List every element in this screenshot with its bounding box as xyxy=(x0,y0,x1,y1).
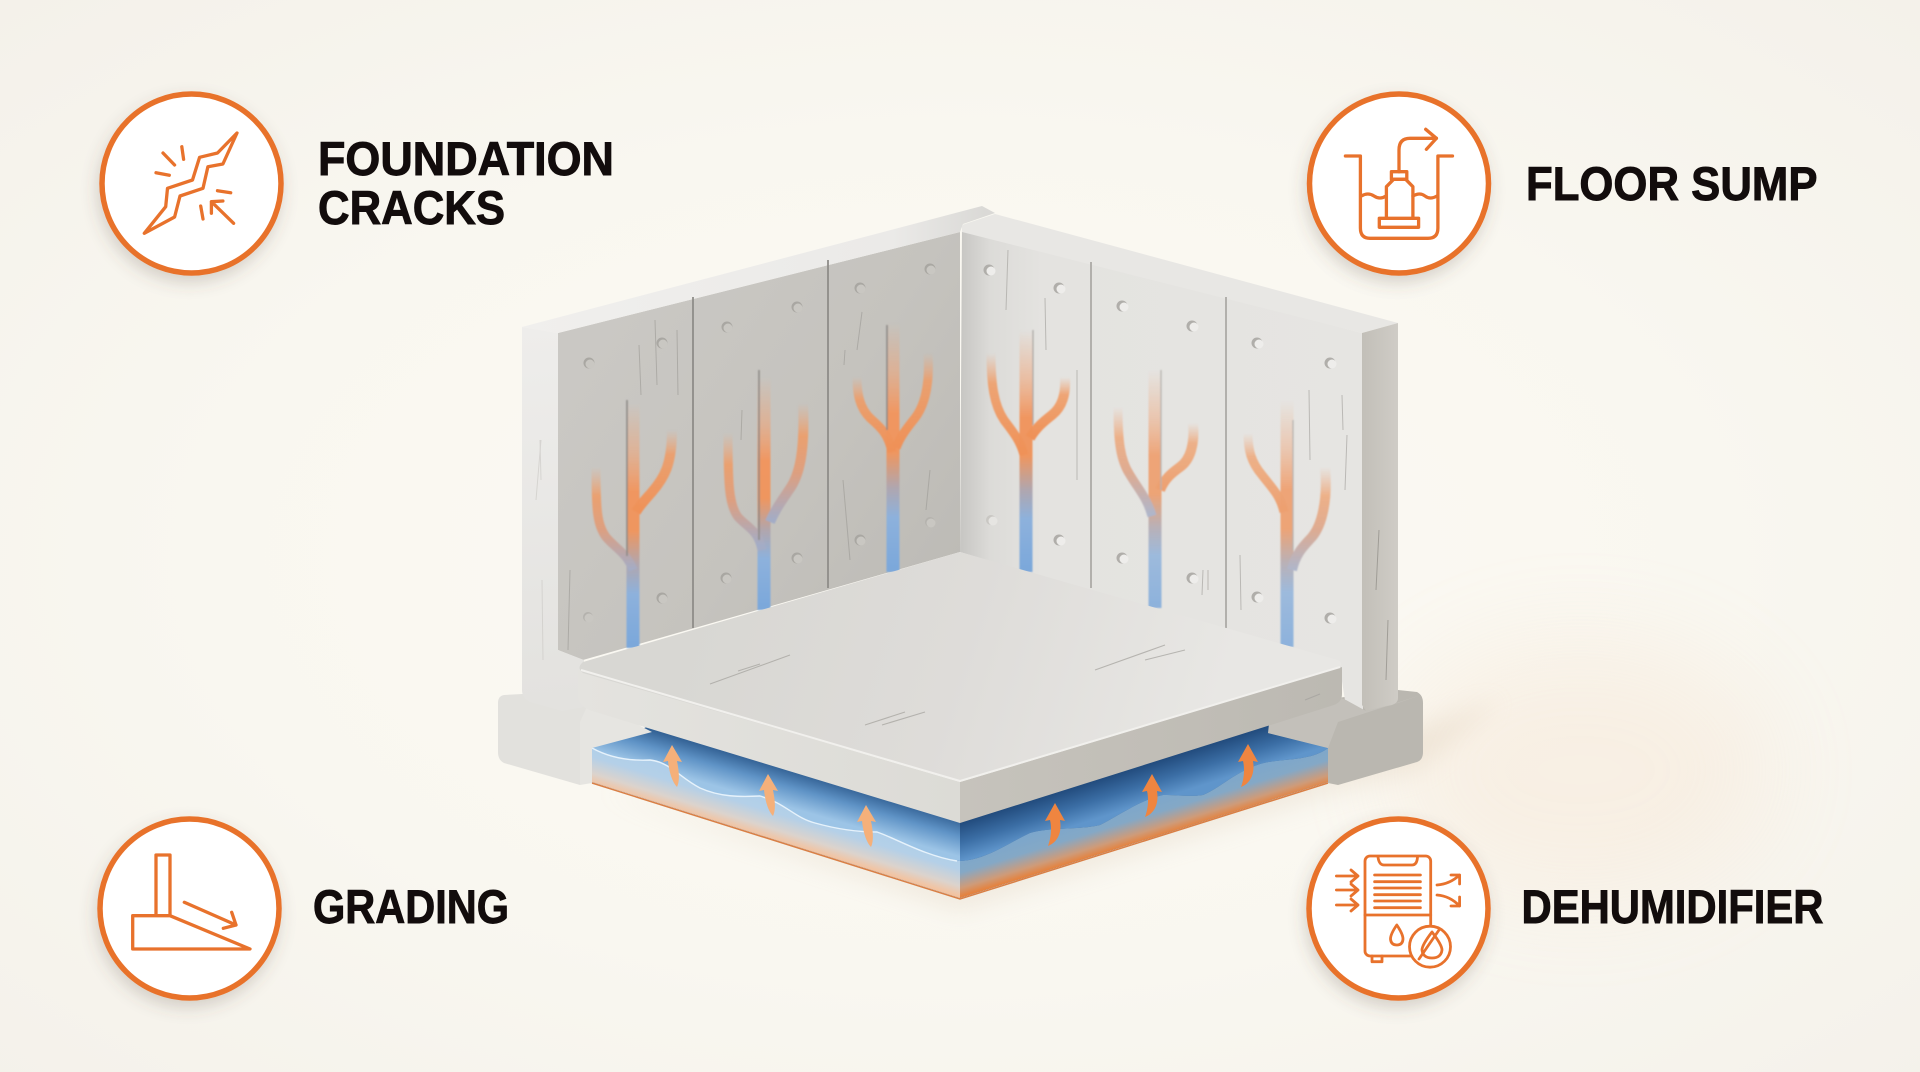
water: right upper dark band xyxy=(960,722,1328,861)
callout: dehumidifier xyxy=(1309,819,1824,998)
icon: dehumidifier unit xyxy=(1336,856,1460,967)
left wall xyxy=(522,206,995,711)
moisture arrows rising: right xyxy=(1045,744,1258,846)
slab: edge highlight xyxy=(581,667,1340,781)
slab: surface scratches xyxy=(710,645,1320,725)
slab: top surface xyxy=(580,552,1341,780)
crack 5 xyxy=(1118,370,1193,608)
crack 2 xyxy=(728,370,803,610)
left wall: end cap xyxy=(522,327,584,711)
left wall: inner face xyxy=(558,232,960,660)
right wall: panel seams xyxy=(1091,262,1226,628)
right wall: form-tie pits xyxy=(984,264,1336,624)
crack 1 xyxy=(596,400,672,648)
icon: sloped grade xyxy=(133,855,250,949)
crack 4 xyxy=(991,330,1065,572)
slab: right side face xyxy=(960,667,1342,823)
groundwater layer xyxy=(592,722,1328,899)
warm cast shadow xyxy=(600,640,1770,910)
right wall: inner face xyxy=(960,228,1363,710)
callout: foundation cracks xyxy=(102,94,614,273)
right wall: top cap xyxy=(962,214,1398,333)
label: CRACKS xyxy=(318,181,505,234)
left wall: hairline scratches xyxy=(536,312,930,660)
water: left upper dark band xyxy=(592,727,960,861)
foundation cutaway illustration xyxy=(100,94,1824,998)
floor slab xyxy=(578,552,1342,823)
moisture arrows rising: left xyxy=(663,745,876,847)
icon: cracked wall xyxy=(144,133,237,233)
water: surface highlight xyxy=(592,748,957,861)
footing: right xyxy=(1268,690,1423,785)
label: GRADING xyxy=(313,880,509,933)
left wall: panel seams xyxy=(693,260,828,628)
left wall: form-tie pits xyxy=(583,264,936,622)
crack 3 xyxy=(857,323,928,572)
footing top and wall base gap: right xyxy=(1268,695,1421,748)
badge circle xyxy=(100,819,279,998)
water: right front face xyxy=(960,748,1328,898)
icon: sump pump xyxy=(1345,129,1452,238)
water: base edge xyxy=(592,783,1328,899)
badge circle xyxy=(102,94,281,273)
callout: grading xyxy=(100,819,509,998)
badge circle xyxy=(1310,94,1488,273)
right wall: end cap xyxy=(1362,323,1398,711)
footing: left xyxy=(498,690,652,785)
label: FOUNDATION xyxy=(318,132,614,185)
label: FLOOR SUMP xyxy=(1526,157,1818,210)
left wall: top cap xyxy=(522,206,995,333)
crack 6 xyxy=(1248,400,1326,647)
label: DEHUMIDIFIER xyxy=(1522,880,1824,933)
right wall xyxy=(960,214,1398,711)
callout: floor sump xyxy=(1310,94,1818,273)
badge circle xyxy=(1309,819,1488,998)
right wall: hairline scratches xyxy=(1006,250,1388,680)
water: left front face xyxy=(592,748,960,898)
slab: left side face xyxy=(578,670,960,823)
